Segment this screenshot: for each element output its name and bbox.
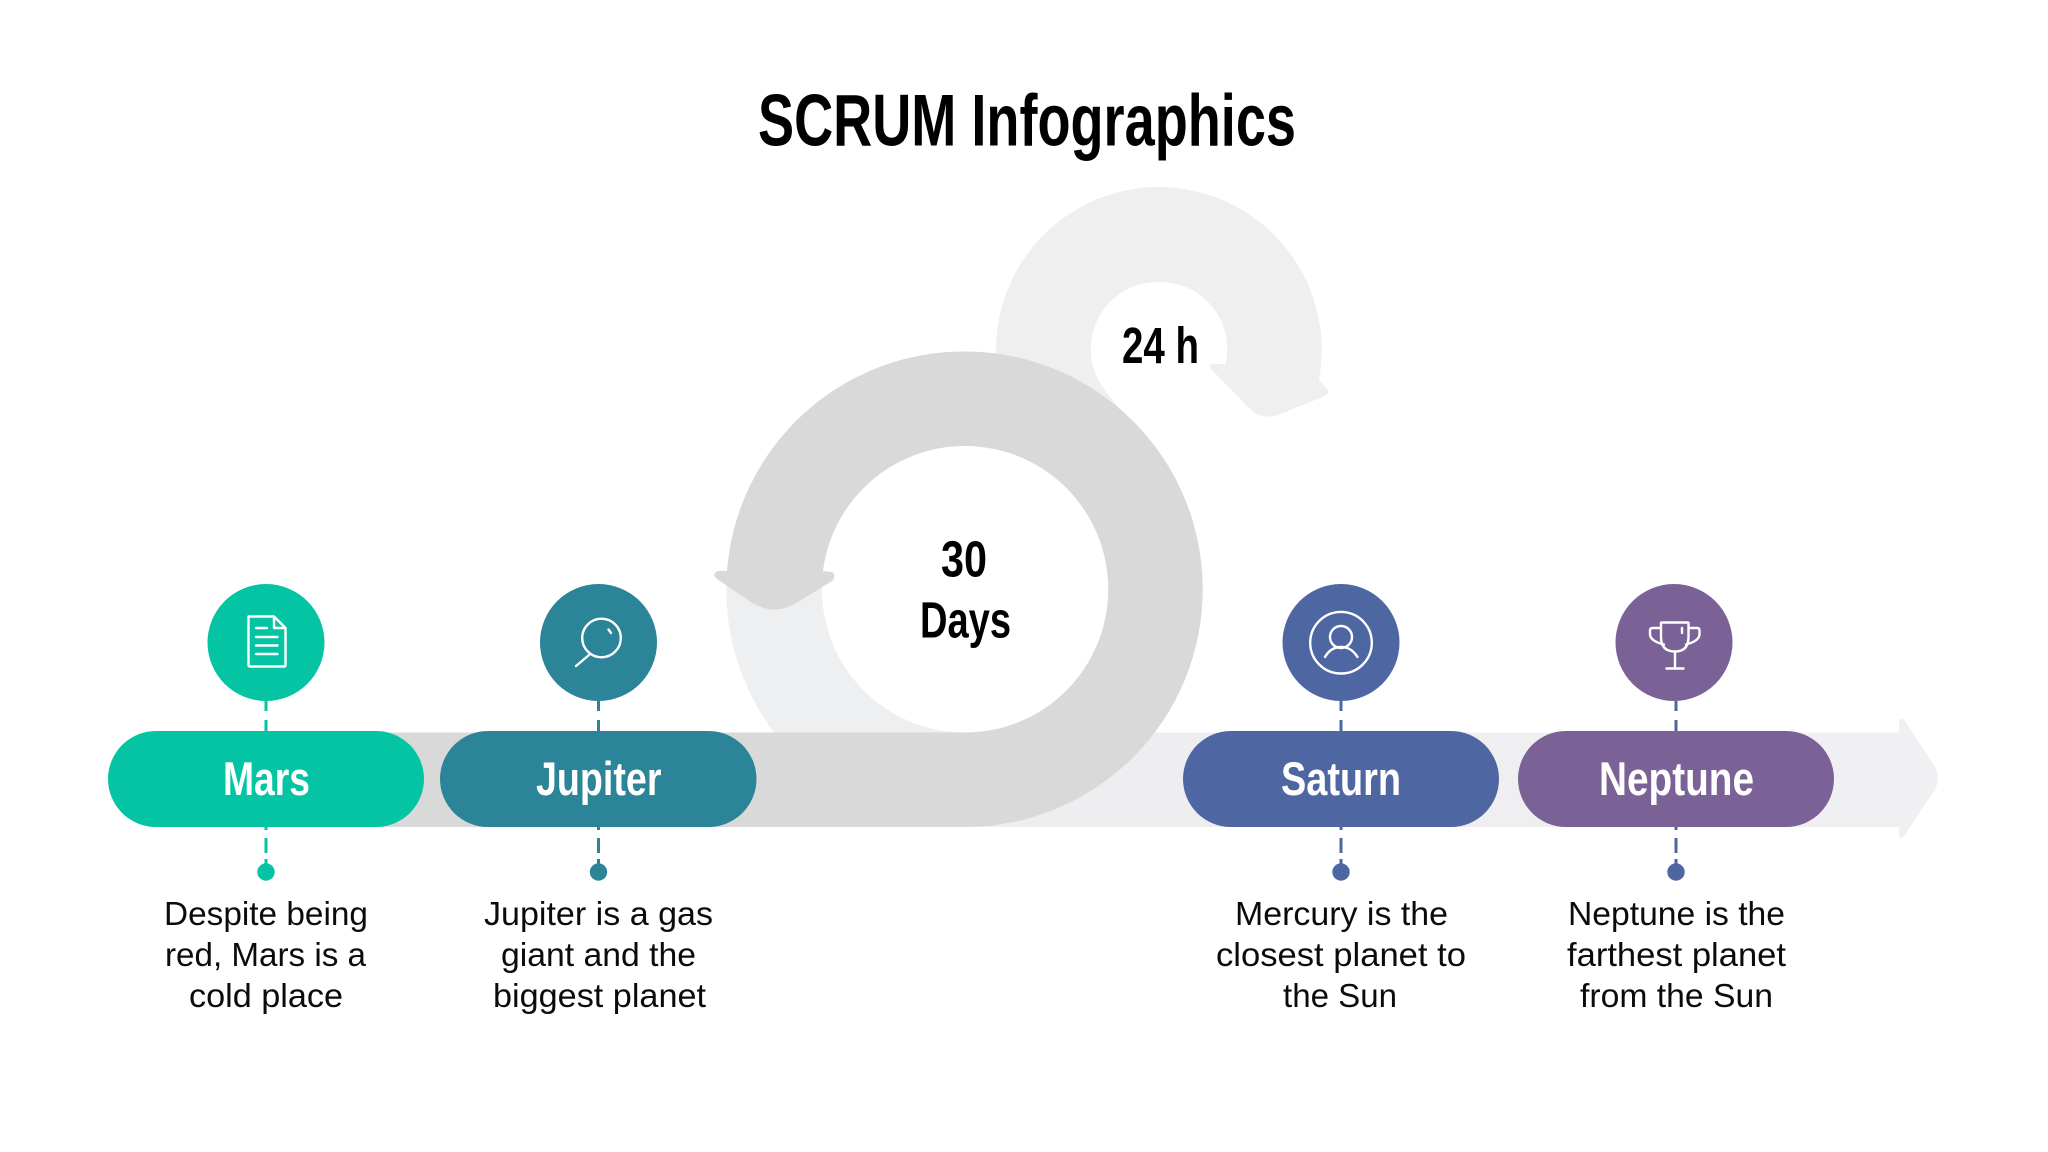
description: Jupiter bbox=[484, 896, 713, 1015]
pill: Saturn: Saturn bbox=[1281, 752, 1401, 805]
dot: Mars bbox=[257, 863, 275, 881]
arrow: large 30 days cycle bbox=[300, 351, 1203, 827]
title: SCRUM Infographics bbox=[758, 80, 1296, 162]
icon: trophy bbox=[1616, 584, 1732, 701]
step: Mars bbox=[108, 584, 424, 1015]
description: Saturn bbox=[1216, 896, 1466, 1015]
connector: Mars bbox=[264, 701, 268, 866]
icon: document bbox=[208, 584, 324, 701]
timeline arrow bbox=[300, 719, 1938, 838]
pill: Saturn bbox=[1183, 731, 1499, 827]
pill: Neptune bbox=[1518, 731, 1834, 827]
label: 30 Days: Days bbox=[920, 592, 1011, 648]
pill: Mars: Mars bbox=[223, 752, 310, 805]
connector: Saturn bbox=[1340, 701, 1342, 866]
description: Mars bbox=[164, 896, 368, 1015]
connector: Jupiter bbox=[597, 701, 600, 866]
description: Jupiter: giant and the bbox=[501, 937, 696, 974]
description: Neptune bbox=[1567, 896, 1787, 1015]
step: Jupiter bbox=[440, 584, 756, 1015]
dot: Jupiter bbox=[590, 863, 607, 881]
icon: user bbox=[1282, 584, 1400, 701]
dot: Saturn bbox=[1332, 863, 1350, 881]
icon: magnifier bbox=[540, 584, 657, 701]
description: Saturn: Mercury is the bbox=[1235, 896, 1448, 933]
description: Mars: Despite being bbox=[164, 896, 368, 933]
pill: Neptune: Neptune bbox=[1599, 752, 1754, 805]
pill: Jupiter: Jupiter bbox=[536, 752, 662, 805]
label: 24 h: 24 h bbox=[1122, 317, 1199, 374]
label: 30 Days bbox=[920, 530, 1011, 648]
description: Neptune: from the Sun bbox=[1580, 978, 1773, 1015]
label: 30 Days: 30 bbox=[941, 530, 987, 588]
step: Neptune bbox=[1518, 584, 1834, 1015]
description: Jupiter: biggest planet bbox=[493, 978, 707, 1015]
description: Jupiter: Jupiter is a gas bbox=[484, 896, 713, 933]
description: Neptune: Neptune is the bbox=[1568, 896, 1785, 933]
arrow: small 24 h cycle bbox=[996, 187, 1328, 420]
description: Saturn: closest planet to bbox=[1216, 937, 1466, 974]
connector: Neptune bbox=[1674, 701, 1678, 866]
description: Mars: red, Mars is a bbox=[165, 937, 366, 974]
step: Saturn bbox=[1183, 584, 1499, 1015]
dot: Neptune bbox=[1667, 863, 1685, 881]
pill: Jupiter bbox=[440, 731, 756, 827]
arrow: large 30 days cycle fading tail bbox=[726, 571, 965, 733]
description: Neptune: farthest planet bbox=[1567, 937, 1787, 974]
description: Saturn: the Sun bbox=[1283, 978, 1397, 1015]
pill: Mars bbox=[108, 731, 424, 827]
description: Mars: cold place bbox=[189, 978, 343, 1015]
